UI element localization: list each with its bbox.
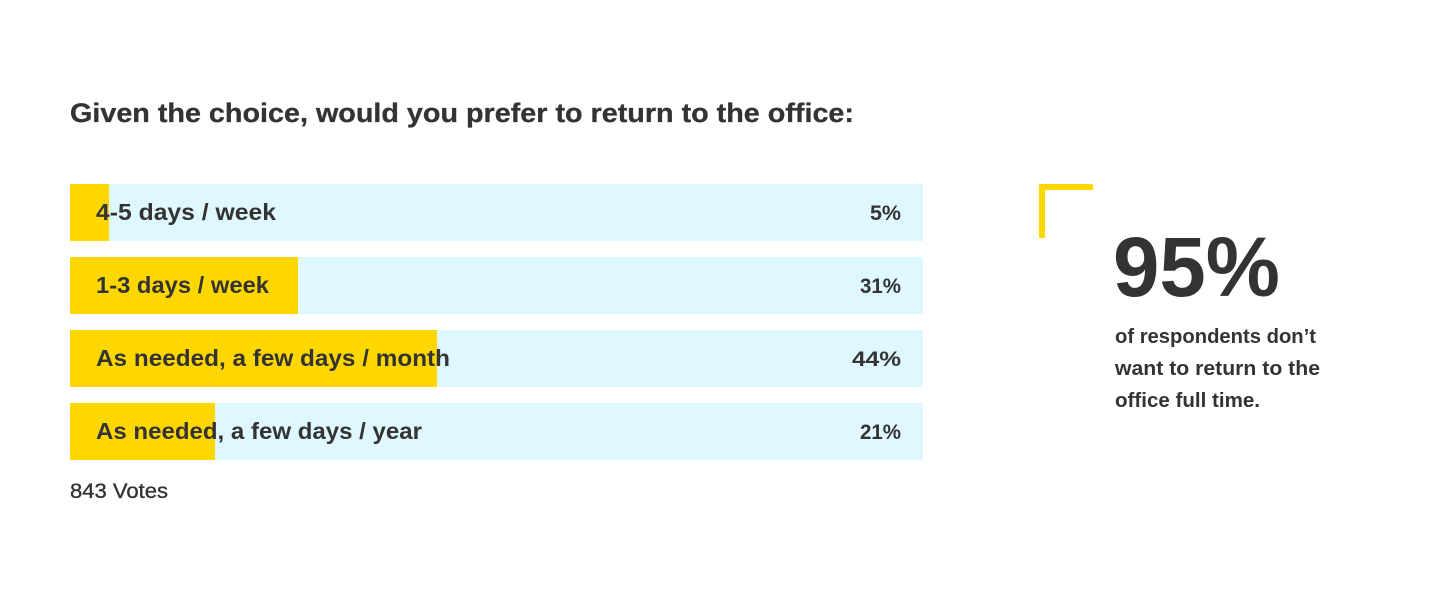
bar row: 4-5 days / week [70, 184, 923, 241]
vote count: 843 Votes [70, 480, 168, 503]
bar row: 1-3 days / week: 31% [860, 275, 901, 298]
bar row: as needed, a few days / month: 44% [852, 348, 901, 371]
bar row: 4-5 days / week: 5% [870, 202, 901, 225]
corner bracket accent [1039, 184, 1093, 238]
bar row: as needed, a few days / year [70, 403, 923, 460]
bar row: 1-3 days / week [70, 257, 923, 314]
big statistic: 95% [1113, 220, 1280, 314]
bar row: 4-5 days / week: 4-5 days / week [96, 199, 276, 225]
statistic description [1114, 326, 1320, 412]
statistic description: office full time. [1115, 390, 1260, 412]
bar row: as needed, a few days / year: As needed, a few days / year [96, 418, 422, 444]
title: Given the choice, would you prefer to return to the office: [70, 98, 854, 128]
statistic description: of respondents don’t [1115, 326, 1316, 348]
bar row: as needed, a few days / year: 21% [860, 421, 901, 444]
bar chart [70, 184, 923, 460]
bar row: as needed, a few days / month [70, 330, 923, 387]
bar row: 1-3 days / week: 1-3 days / week [96, 272, 269, 298]
statistic description: want to return to the [1114, 358, 1320, 380]
bar row: as needed, a few days / month: As needed, a few days / month [96, 345, 450, 371]
